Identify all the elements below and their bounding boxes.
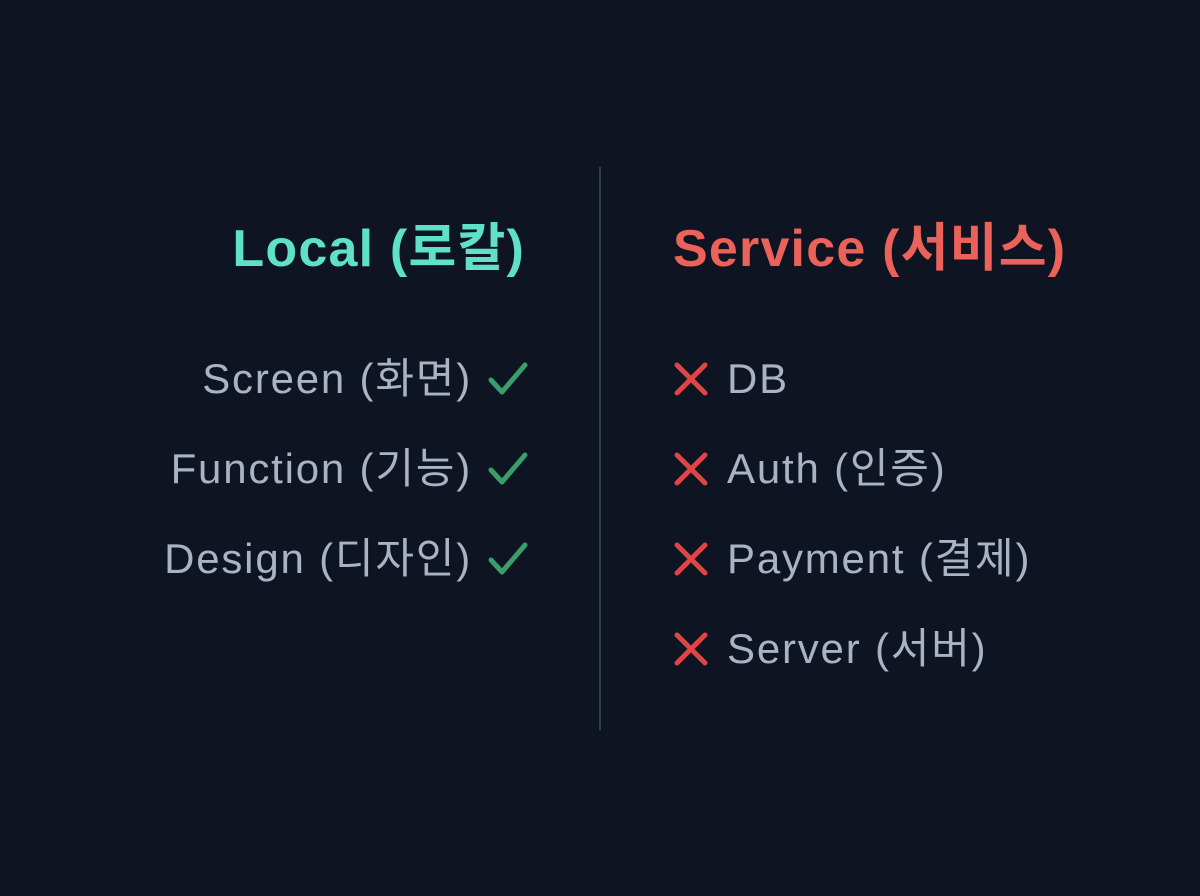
item: server: Server (서버) <box>727 625 987 672</box>
item: design: Design (디자인) <box>164 535 472 582</box>
item: db: DB <box>727 355 789 402</box>
item: db <box>674 355 789 402</box>
item: function: Function (기능) <box>171 445 472 492</box>
divider <box>599 167 601 730</box>
heading: service: Service (서비스) <box>673 220 1066 278</box>
item: payment: Payment (결제) <box>727 535 1031 582</box>
item: auth: Auth (인증) <box>727 445 947 492</box>
list: service items <box>674 355 1031 672</box>
heading: local: Local (로칼) <box>232 220 525 278</box>
list: local items <box>164 355 528 582</box>
item: screen: Screen (화면) <box>202 355 472 402</box>
